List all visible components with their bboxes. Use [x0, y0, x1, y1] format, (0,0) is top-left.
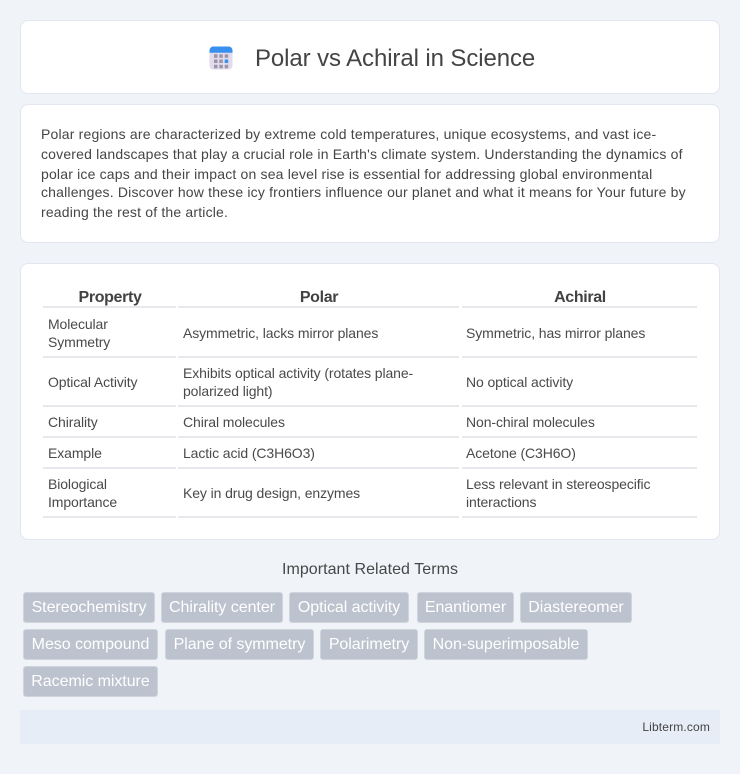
intro paragraph: polar ice caps and their impact on sea level rise is essential for addressing global environmental — [41, 166, 652, 182]
tag — [23, 629, 158, 660]
tag — [161, 592, 283, 623]
tag: Diastereomer — [528, 599, 624, 616]
tag: Plane of symmetry — [174, 636, 305, 653]
row: example: Example — [48, 445, 102, 461]
table header row: Polar — [300, 289, 338, 306]
intro paragraph: covered landscapes that play a crucial role in Earth's climate system. Understanding the dynamics of — [41, 146, 683, 162]
tag — [417, 592, 514, 623]
intro paragraph: reading the rest of the article. — [41, 204, 228, 220]
tag — [165, 629, 314, 660]
row: optical activity: polarized light) — [183, 383, 272, 399]
icon: calendar — [210, 46, 232, 70]
row: biological importance: Less relevant in stereospecific — [466, 476, 650, 492]
tag: Chirality center — [169, 599, 275, 616]
tag — [23, 666, 158, 697]
row: chirality: Non-chiral molecules — [466, 414, 595, 430]
tag: Meso compound — [32, 636, 149, 653]
footer bar — [20, 710, 720, 744]
row: example: Lactic acid (C3H6O3) — [183, 445, 315, 461]
tag — [424, 629, 588, 660]
tag: Enantiomer — [425, 599, 506, 616]
row: optical activity: Optical Activity — [48, 374, 137, 390]
tag: Non-superimposable — [433, 636, 579, 653]
table header row: Achiral — [554, 289, 606, 306]
row: biological importance: Key in drug design, enzymes — [183, 485, 360, 501]
tag — [23, 592, 155, 623]
footer credit: Libterm.com — [642, 720, 710, 734]
row: chirality — [43, 414, 697, 438]
related terms heading: Important Related Terms — [282, 561, 458, 578]
table header row — [43, 289, 697, 308]
row: molecular symmetry — [43, 316, 697, 358]
row: chirality: Chirality — [48, 414, 98, 430]
row: biological importance: interactions — [466, 494, 536, 510]
row: optical activity — [43, 365, 697, 407]
row: molecular symmetry: Asymmetric, lacks mirror planes — [183, 325, 378, 341]
row: optical activity: Exhibits optical activity (rotates plane- — [183, 365, 413, 381]
intro paragraph — [41, 126, 686, 220]
row: biological importance: Importance — [48, 494, 117, 510]
row: optical activity: No optical activity — [466, 374, 573, 390]
table header row: Property — [78, 289, 142, 306]
intro paragraph: challenges. Discover how these icy frontiers influence our planet and what it means for Your future by — [41, 184, 686, 200]
tag — [320, 629, 418, 660]
tag: Polarimetry — [329, 636, 409, 653]
tag: Stereochemistry — [32, 599, 146, 616]
row: biological importance: Biological — [48, 476, 107, 492]
row: molecular symmetry: Symmetry — [48, 334, 110, 350]
tag: Racemic mixture — [31, 673, 150, 690]
row: example: Acetone (C3H6O) — [466, 445, 576, 461]
header panel — [20, 20, 720, 94]
row: molecular symmetry: Symmetric, has mirror planes — [466, 325, 645, 341]
row: example — [43, 445, 697, 469]
row: molecular symmetry: Molecular — [48, 316, 108, 332]
comparison table panel — [20, 263, 720, 540]
title: Polar vs Achiral in Science — [255, 45, 535, 72]
related terms tags — [23, 592, 632, 697]
row: chirality: Chiral molecules — [183, 414, 285, 430]
tag — [520, 592, 632, 623]
intro text panel — [20, 104, 720, 243]
tag: Optical activity — [298, 599, 400, 616]
comparison table — [43, 289, 697, 518]
intro paragraph: Polar regions are characterized by extreme cold temperatures, unique ecosystems, and vast ice- — [41, 126, 656, 142]
row: biological importance — [43, 476, 697, 518]
tag — [289, 592, 409, 623]
